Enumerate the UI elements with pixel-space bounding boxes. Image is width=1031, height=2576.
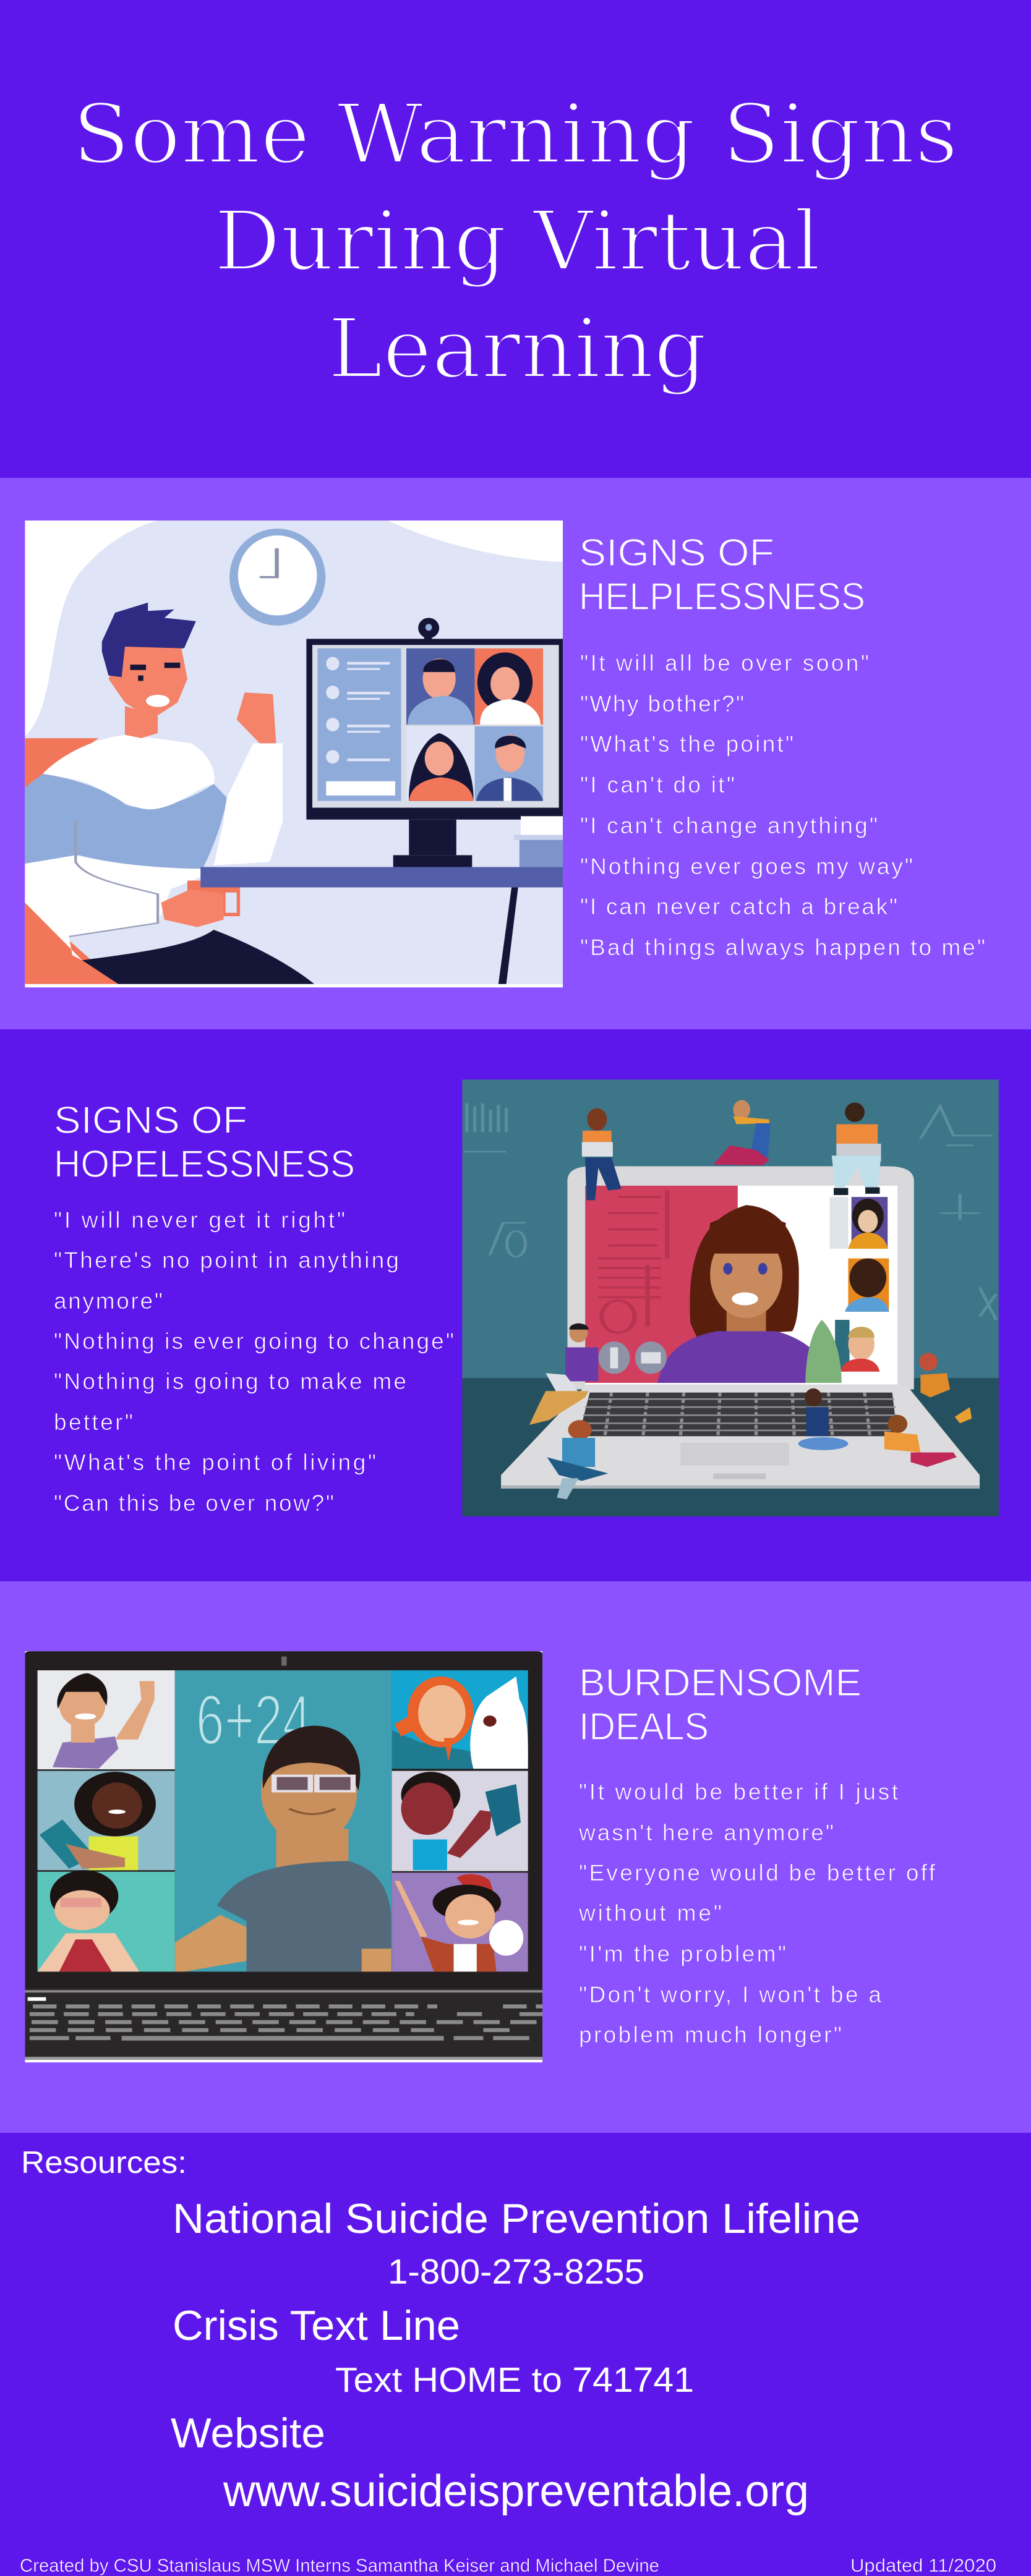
illustration: teacher and students on laptop screen: 6+24 — [196, 1680, 311, 1759]
panel: signs of helplessness — [0, 478, 1031, 1029]
updated date: Updated 11/2020 — [850, 2556, 996, 2576]
text block: hopelessness quotes: better" — [54, 1409, 133, 1435]
text block: helplessness quotes: "I can't do it" — [580, 772, 735, 797]
text block: helplessness quotes — [580, 650, 985, 960]
website label: Website — [171, 2410, 325, 2457]
heading: signs of hopelessness: SIGNS OF — [54, 1099, 247, 1142]
panel: resources — [0, 2133, 1031, 2576]
lifeline name: National Suicide Prevention Lifeline — [173, 2195, 860, 2242]
website address: www.suicideispreventable.org — [223, 2467, 809, 2516]
student tile: boy with book — [401, 1772, 521, 1870]
text block: hopelessness quotes: "Nothing is ever going to change" — [54, 1328, 454, 1354]
heading: burdensome ideals: IDEALS — [579, 1706, 709, 1748]
text block: helplessness quotes: "Nothing ever goes my way" — [580, 854, 913, 879]
title: Some Warning Signs — [72, 87, 958, 182]
heading: signs of helplessness: SIGNS OF — [579, 532, 774, 574]
text block: hopelessness quotes: "Nothing is going to make me — [54, 1369, 406, 1394]
text block: hopelessness quotes: "There's no point in anything — [54, 1248, 399, 1273]
text block: burdensome quotes — [578, 1779, 936, 2047]
illustration: man on video call at monitor — [25, 521, 563, 987]
title: Learning — [328, 302, 707, 397]
heading: signs of hopelessness — [54, 1099, 355, 1186]
text block: helplessness quotes: "It will all be over soon" — [580, 650, 869, 676]
heading: signs of helplessness — [579, 532, 865, 618]
text block: helplessness quotes: "What's the point" — [580, 731, 794, 757]
credit line: Created by CSU Stanislaus MSW Interns Samantha Keiser and Michael Devine — [20, 2556, 659, 2576]
student tile: girl with paintbrush and parrot — [395, 1874, 523, 1971]
panel: signs of hopelessness — [0, 1029, 1031, 1581]
student tile: girl with glasses — [38, 1870, 139, 1971]
figures on the keyboard and floor — [529, 1323, 972, 1499]
illustration: teacher and students on laptop screen — [25, 1651, 542, 2062]
title: During Virtual — [214, 194, 821, 289]
student tile: girl with book — [40, 1772, 156, 1870]
text block: burdensome quotes: without me" — [578, 1900, 722, 1926]
illustration: students around giant laptop — [462, 1079, 999, 1516]
text block: burdensome quotes: problem much longer" — [579, 2022, 842, 2047]
text block: burdensome quotes: wasn't here anymore" — [578, 1820, 834, 1845]
text block: burdensome quotes: "I'm the problem" — [579, 1941, 786, 1966]
student tile: girl with white dog — [392, 1677, 528, 1769]
text block: burdensome quotes: "It would be better if I just — [579, 1779, 899, 1804]
text block: hopelessness quotes: "I will never get it right" — [54, 1207, 345, 1233]
text block: hopelessness quotes: "What's the point of living" — [54, 1450, 376, 1475]
text block: helplessness quotes: "I can never catch a break" — [580, 894, 897, 919]
student tile: boy waving — [53, 1673, 155, 1769]
header band — [0, 0, 1031, 478]
text block: hopelessness quotes: anymore" — [54, 1288, 163, 1314]
resources label: Resources: — [21, 2145, 187, 2180]
panel: burdensome ideals — [0, 1581, 1031, 2133]
figures on the laptop lid — [582, 1100, 881, 1201]
heading: burdensome ideals: BURDENSOME — [579, 1662, 862, 1704]
text block: burdensome quotes: "Everyone would be better off — [579, 1860, 936, 1885]
text block: helplessness quotes: "Bad things always happen to me" — [580, 935, 985, 960]
text block: hopelessness quotes: "Can this be over now?" — [54, 1490, 334, 1516]
heading: signs of hopelessness: HOPELESSNESS — [54, 1143, 355, 1186]
heading: burdensome ideals — [579, 1662, 862, 1748]
crisis text instruction: Text HOME to 741741 — [335, 2360, 694, 2400]
heading: signs of helplessness: HELPLESSNESS — [579, 576, 865, 618]
crisis text line name: Crisis Text Line — [173, 2302, 460, 2349]
title — [72, 87, 958, 397]
lifeline phone number: 1-800-273-8255 — [388, 2252, 644, 2292]
teacher — [175, 1725, 391, 1971]
text block: hopelessness quotes — [54, 1207, 454, 1516]
text block: helplessness quotes: "Why bother?" — [580, 691, 744, 716]
text block: burdensome quotes: "Don't worry, I won't be a — [579, 1982, 881, 2007]
text block: helplessness quotes: "I can't change anything" — [580, 813, 878, 838]
